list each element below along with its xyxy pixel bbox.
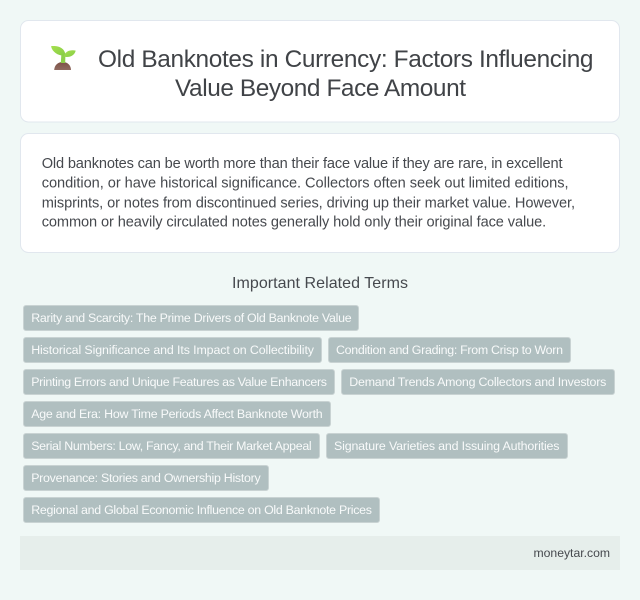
text block: description: condition, or have historical significance. Collectors often seek out limited editions, xyxy=(42,176,568,192)
tag: regional and global: Regional and Global Economic Influence on Old Banknote Prices xyxy=(31,503,372,517)
tag: provenance xyxy=(24,466,268,490)
tag: serial numbers xyxy=(24,434,320,458)
tag: provenance: Provenance: Stories and Ownership History xyxy=(31,471,261,485)
title: Value Beyond Face Amount xyxy=(175,75,466,102)
tag: historical significance xyxy=(24,338,322,362)
tag: condition xyxy=(328,338,570,362)
title xyxy=(98,46,594,102)
text block: description xyxy=(42,156,575,230)
tag list xyxy=(24,306,614,522)
text block: description: misprints, or notes from discontinued series, driving up their market value. However, xyxy=(42,195,575,211)
tag: rarity: Rarity and Scarcity: The Prime Drivers of Old Banknote Value xyxy=(31,311,352,325)
tag: serial numbers: Serial Numbers: Low, Fancy, and Their Market Appeal xyxy=(31,439,312,453)
tag: condition: Condition and Grading: From Crisp to Worn xyxy=(336,343,563,357)
tag: signature varieties: Signature Varieties and Issuing Authorities xyxy=(334,439,560,453)
tag: rarity xyxy=(24,306,358,330)
tag: printing errors: Printing Errors and Unique Features as Value Enhancers xyxy=(31,375,327,389)
tag: demand trends xyxy=(342,370,614,394)
tag: demand trends: Demand Trends Among Collectors and Investors xyxy=(349,375,606,389)
panel: description xyxy=(20,134,620,252)
tag: printing errors xyxy=(24,370,334,394)
title: Old Banknotes in Currency: Factors Influencing xyxy=(98,46,594,73)
heading: important related terms: Important Related Terms xyxy=(232,275,408,292)
panel: title card xyxy=(20,20,620,122)
footer bar xyxy=(20,536,620,570)
tag: historical significance: Historical Significance and Its Impact on Collectibility xyxy=(31,343,315,357)
text block: description: common or heavily circulated notes generally hold only their original face value. xyxy=(42,214,546,230)
tag: age and era xyxy=(24,402,330,426)
footer source: moneytar.com xyxy=(534,546,610,560)
icon: seedling xyxy=(51,46,76,70)
text block: description: Old banknotes can be worth more than their face value if they are rare, in excellent xyxy=(42,156,562,172)
tag: signature varieties xyxy=(326,434,568,458)
tag: age and era: Age and Era: How Time Periods Affect Banknote Worth xyxy=(31,407,323,421)
tag: regional and global xyxy=(24,498,380,522)
